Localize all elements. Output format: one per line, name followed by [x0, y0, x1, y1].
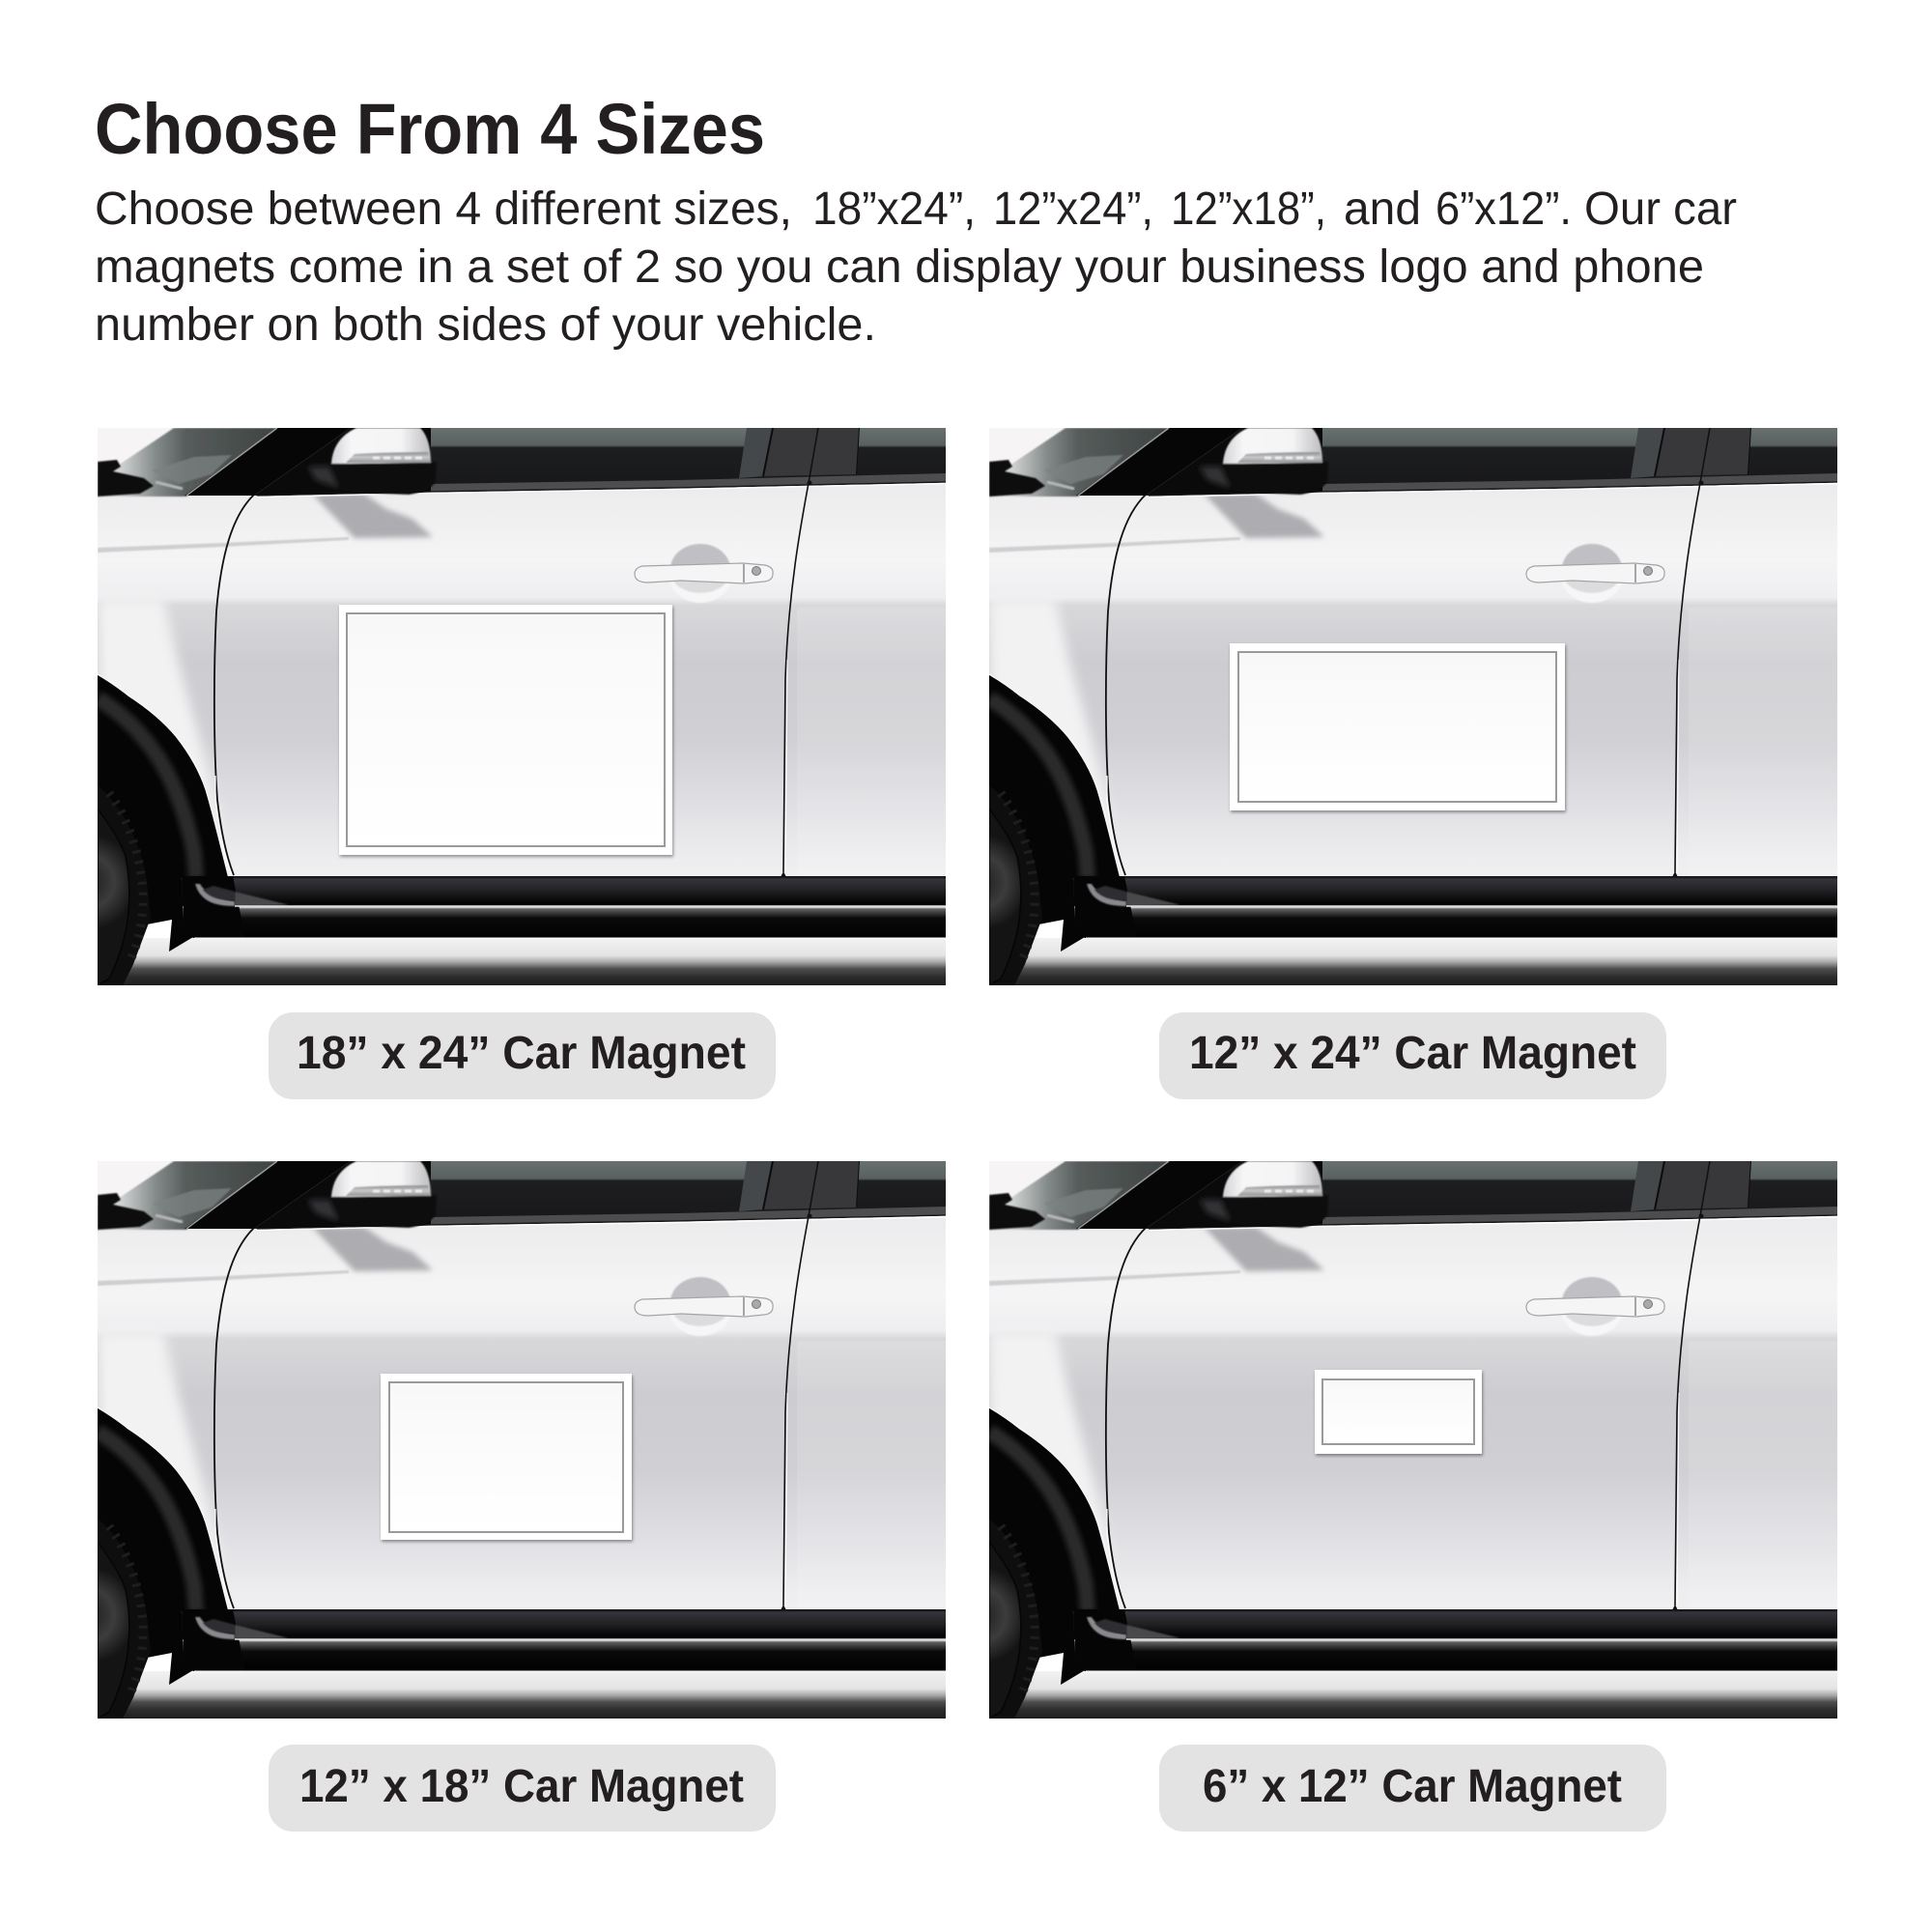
car door photo [98, 428, 946, 985]
intro text block: 12”x24”, [993, 184, 1153, 235]
magnet: 6 x 12 [1315, 1370, 1482, 1454]
intro text block: Our car [1584, 184, 1737, 235]
panel: 12 x 24 car magnet [989, 428, 1837, 1099]
size label pill: 12” x 24” Car Magnet [1189, 1028, 1636, 1079]
intro text block: 6”x12”. [1435, 184, 1572, 235]
size label pill [1159, 1745, 1666, 1832]
title: Choose From 4 Sizes [95, 89, 765, 169]
size label pill: 18” x 24” Car Magnet [297, 1028, 746, 1079]
intro text block: and [1344, 184, 1421, 235]
intro text block [95, 184, 1737, 351]
car door photo [98, 1161, 946, 1719]
car door photo [989, 428, 1837, 985]
magnet: 12 x 18 [381, 1374, 632, 1540]
magnet: 12 x 24 [1230, 643, 1565, 810]
magnet: 18 x 24 [339, 605, 672, 855]
panel: 18 x 24 car magnet [98, 428, 946, 1099]
size label pill [1159, 1012, 1666, 1099]
intro text block: magnets come in a set of 2 so you can display your business logo and phone [95, 242, 1704, 293]
panel: 6 x 12 car magnet [989, 1161, 1837, 1832]
size label pill [269, 1745, 776, 1832]
size label pill [269, 1012, 776, 1099]
size label pill: 12” x 18” Car Magnet [299, 1761, 744, 1812]
size label pill: 6” x 12” Car Magnet [1203, 1761, 1622, 1812]
car door photo [989, 1161, 1837, 1719]
intro text block: number on both sides of your vehicle. [95, 299, 876, 351]
intro text block: 12”x18”, [1171, 184, 1326, 235]
intro text block: Choose between 4 different sizes, [95, 184, 792, 235]
intro text block: 18”x24”, [812, 184, 976, 235]
panel: 12 x 18 car magnet [98, 1161, 946, 1832]
